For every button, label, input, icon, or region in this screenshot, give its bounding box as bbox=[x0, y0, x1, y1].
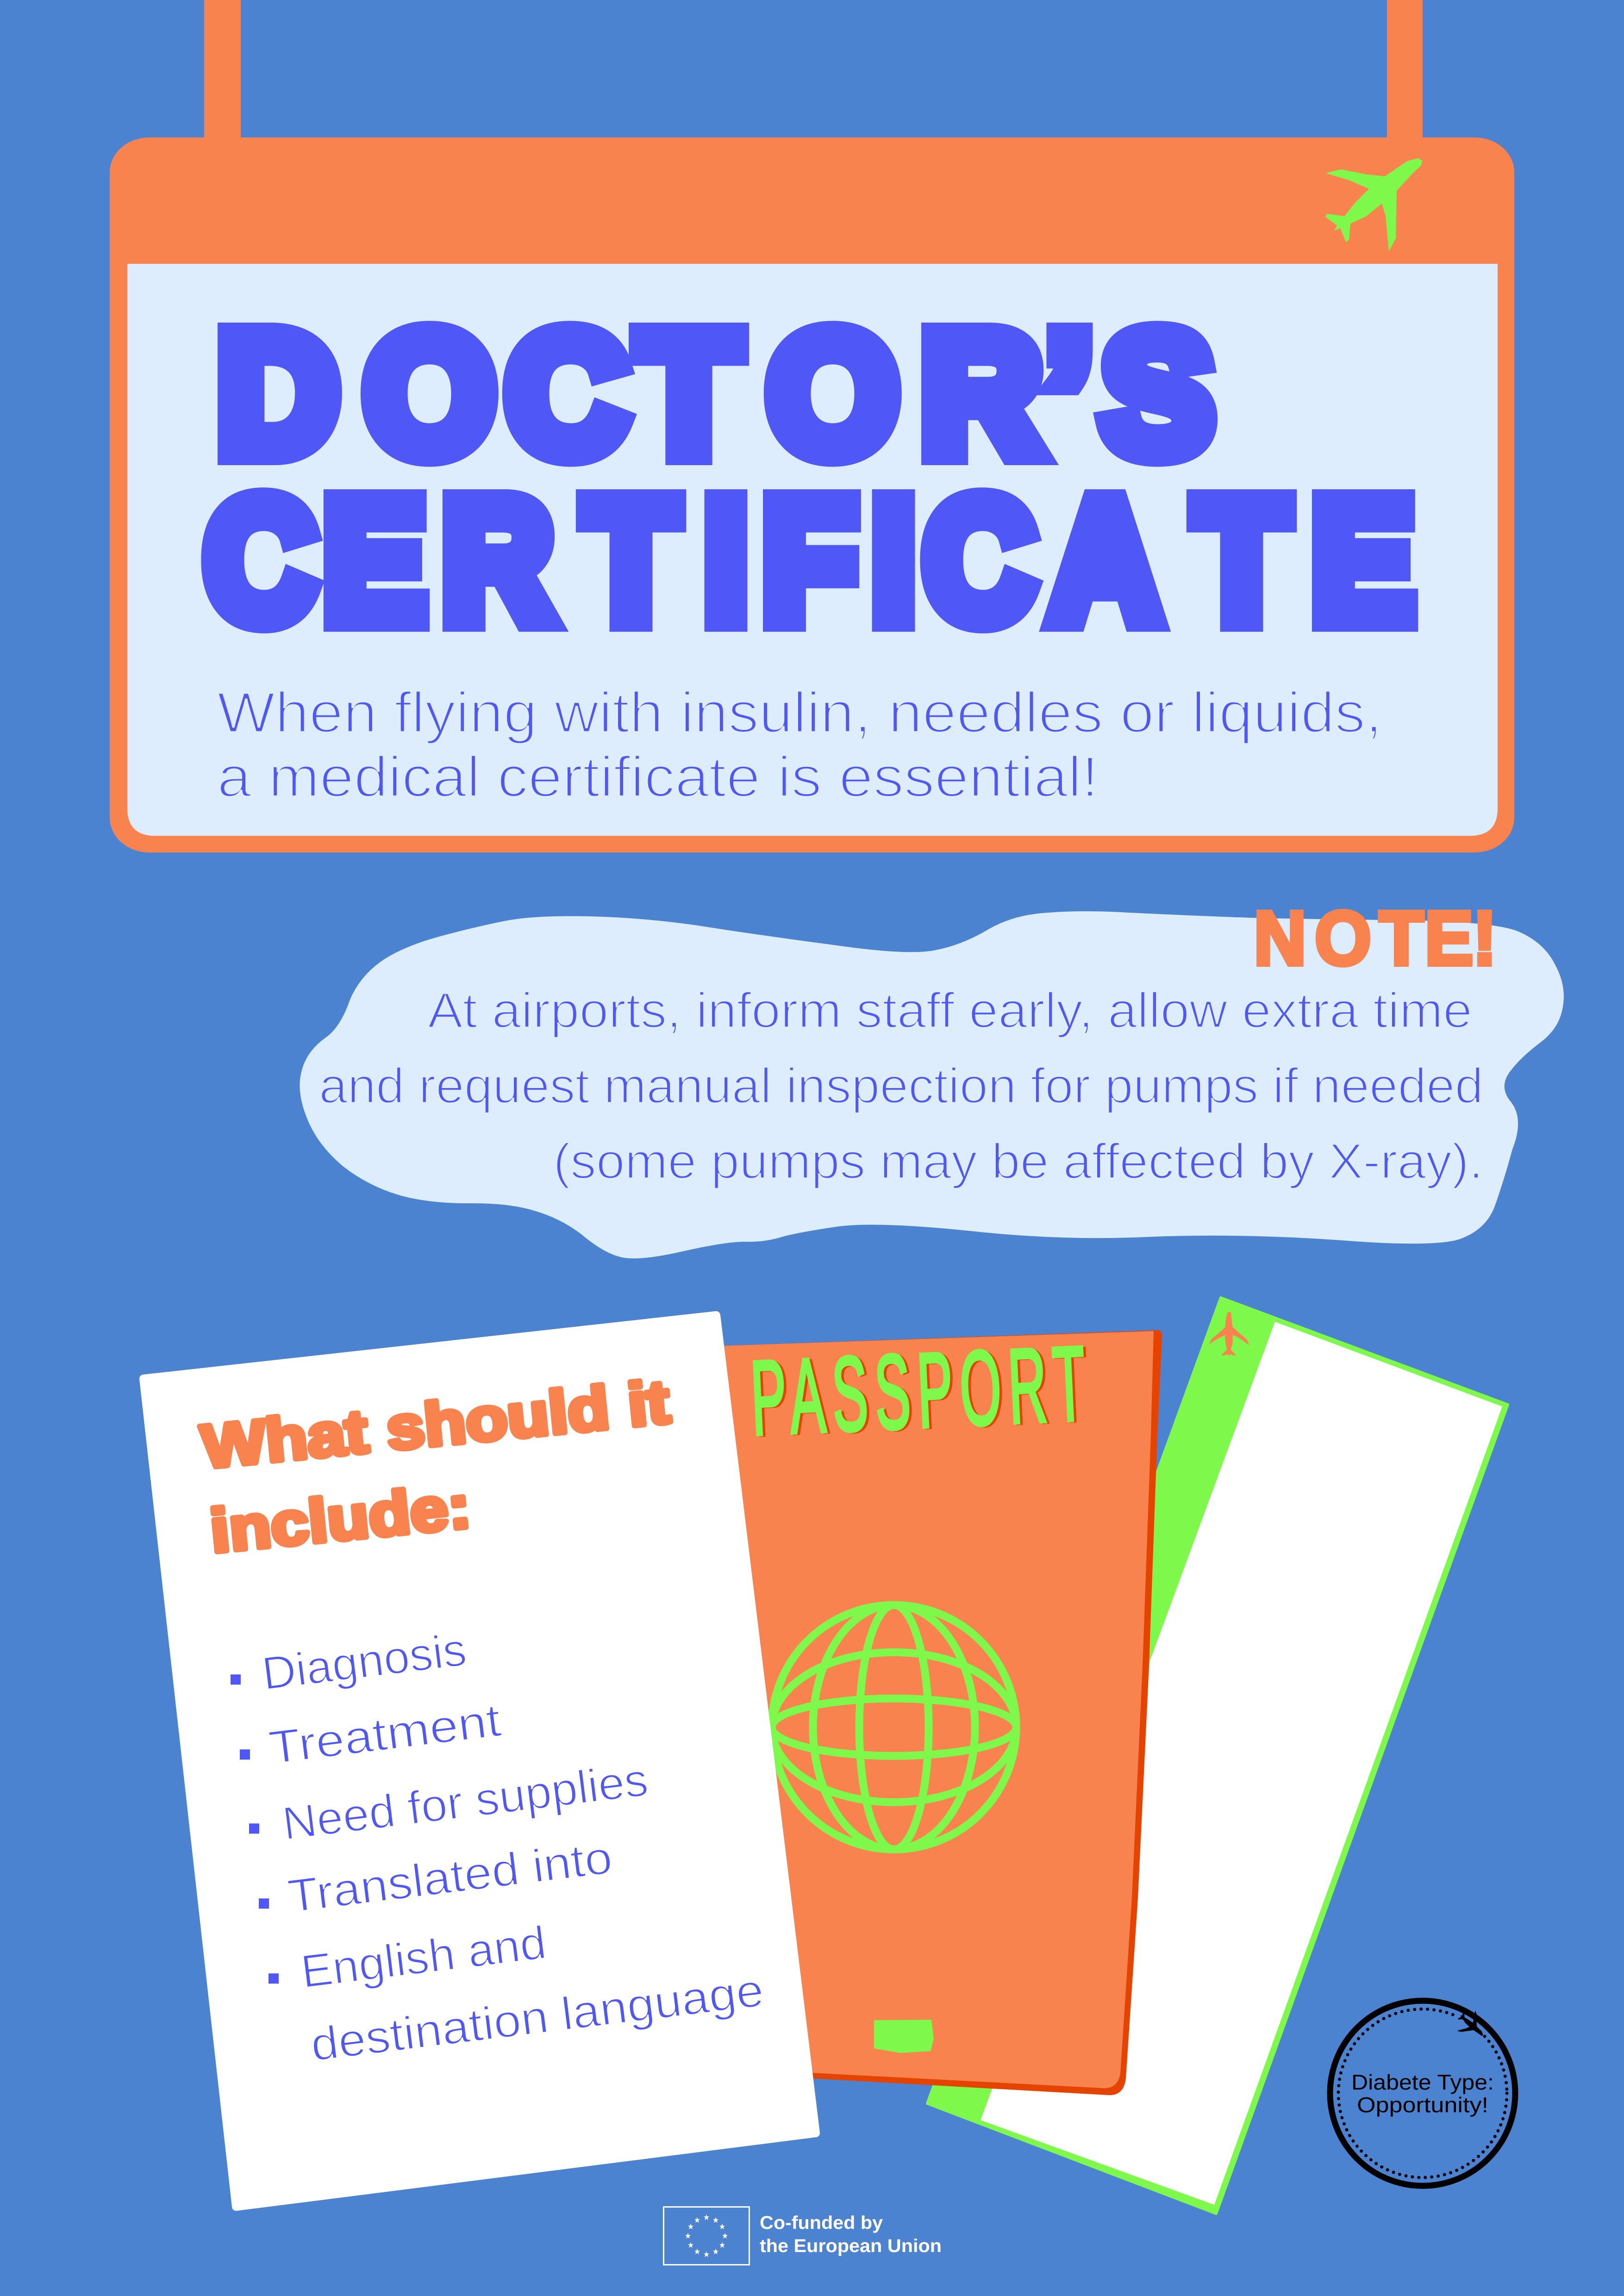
ticket white face bbox=[981, 1322, 1502, 2205]
stamp dotted ring bbox=[1338, 2009, 1507, 2178]
list item: translated into: Translated into bbox=[285, 1831, 615, 1923]
bullet list bbox=[259, 1624, 766, 2071]
panel: hanging departure sign bbox=[110, 0, 1514, 852]
list item: english and: English and bbox=[298, 1916, 549, 1998]
title bbox=[206, 298, 1413, 657]
icon: green plane bbox=[1325, 158, 1422, 251]
note line two: and request manual inspection for pumps if needed bbox=[319, 1058, 1483, 1114]
stamp text bbox=[1351, 2070, 1494, 2117]
list item: destination language: destination language bbox=[308, 1964, 766, 2071]
subtitle line two: a medical certificate is essential! bbox=[217, 745, 1099, 809]
list item: need for supplies: Need for supplies bbox=[280, 1754, 651, 1850]
icon: globe bbox=[772, 1605, 1016, 1849]
note line one: At airports, inform staff early, allow extra time bbox=[428, 982, 1472, 1038]
eu credit text bbox=[760, 2213, 942, 2256]
subtitle line one: When flying with insulin, needles or liquids, bbox=[217, 681, 1382, 745]
passport chip mark bbox=[874, 2020, 934, 2053]
sign inner panel bbox=[127, 264, 1498, 836]
icon: black plane bbox=[1454, 2010, 1483, 2040]
list item: treatment: Treatment bbox=[266, 1694, 504, 1774]
credit line one: Co-funded by bbox=[760, 2213, 883, 2233]
heading line two: include: bbox=[207, 1472, 474, 1565]
passport label shadow: PASSPORT bbox=[751, 1325, 1098, 1458]
passport label: PASSPORT bbox=[749, 1325, 1095, 1457]
logo: co-funded by the european union bbox=[664, 2207, 942, 2265]
illustration: passport bbox=[722, 1325, 1162, 2095]
card background bbox=[144, 1315, 816, 2207]
stamp line one: Diabete Type: bbox=[1351, 2070, 1494, 2094]
ticket green back bbox=[927, 1298, 1508, 2214]
title line one: DOCTOR’S bbox=[218, 298, 1212, 490]
note blob bbox=[300, 911, 1564, 1258]
eu flag bbox=[664, 2207, 749, 2265]
icon: orange plane on ticket bbox=[1204, 1311, 1258, 1365]
title line two: CERTIFICATE bbox=[206, 465, 1413, 657]
passport dark edge bbox=[722, 1330, 1162, 2095]
sign hanger right bbox=[1387, 0, 1423, 148]
panel: note callout bbox=[300, 896, 1564, 1258]
badge: diabete type stamp bbox=[1330, 2001, 1515, 2186]
stamp outer ring bbox=[1330, 2001, 1515, 2186]
illustration: boarding ticket bbox=[927, 1298, 1508, 2214]
sign frame bbox=[110, 137, 1514, 852]
subtitle bbox=[217, 681, 1382, 809]
sign hanger left bbox=[204, 0, 241, 148]
stamp line two: Opportunity! bbox=[1357, 2093, 1488, 2117]
credit line two: the European Union bbox=[760, 2236, 942, 2256]
note line three: (some pumps may be affected by X-ray). bbox=[553, 1133, 1483, 1189]
note heading: NOTE! bbox=[1254, 896, 1497, 981]
passport cover bbox=[722, 1331, 1154, 2088]
list item: diagnosis: Diagnosis bbox=[259, 1624, 469, 1700]
panel: what should it include card bbox=[144, 1315, 816, 2207]
card heading bbox=[198, 1368, 673, 1565]
bullets bbox=[231, 1674, 279, 1984]
note body text bbox=[319, 982, 1483, 1189]
heading line one: What should it bbox=[198, 1368, 673, 1481]
stamp dot gap bbox=[1452, 2010, 1480, 2037]
